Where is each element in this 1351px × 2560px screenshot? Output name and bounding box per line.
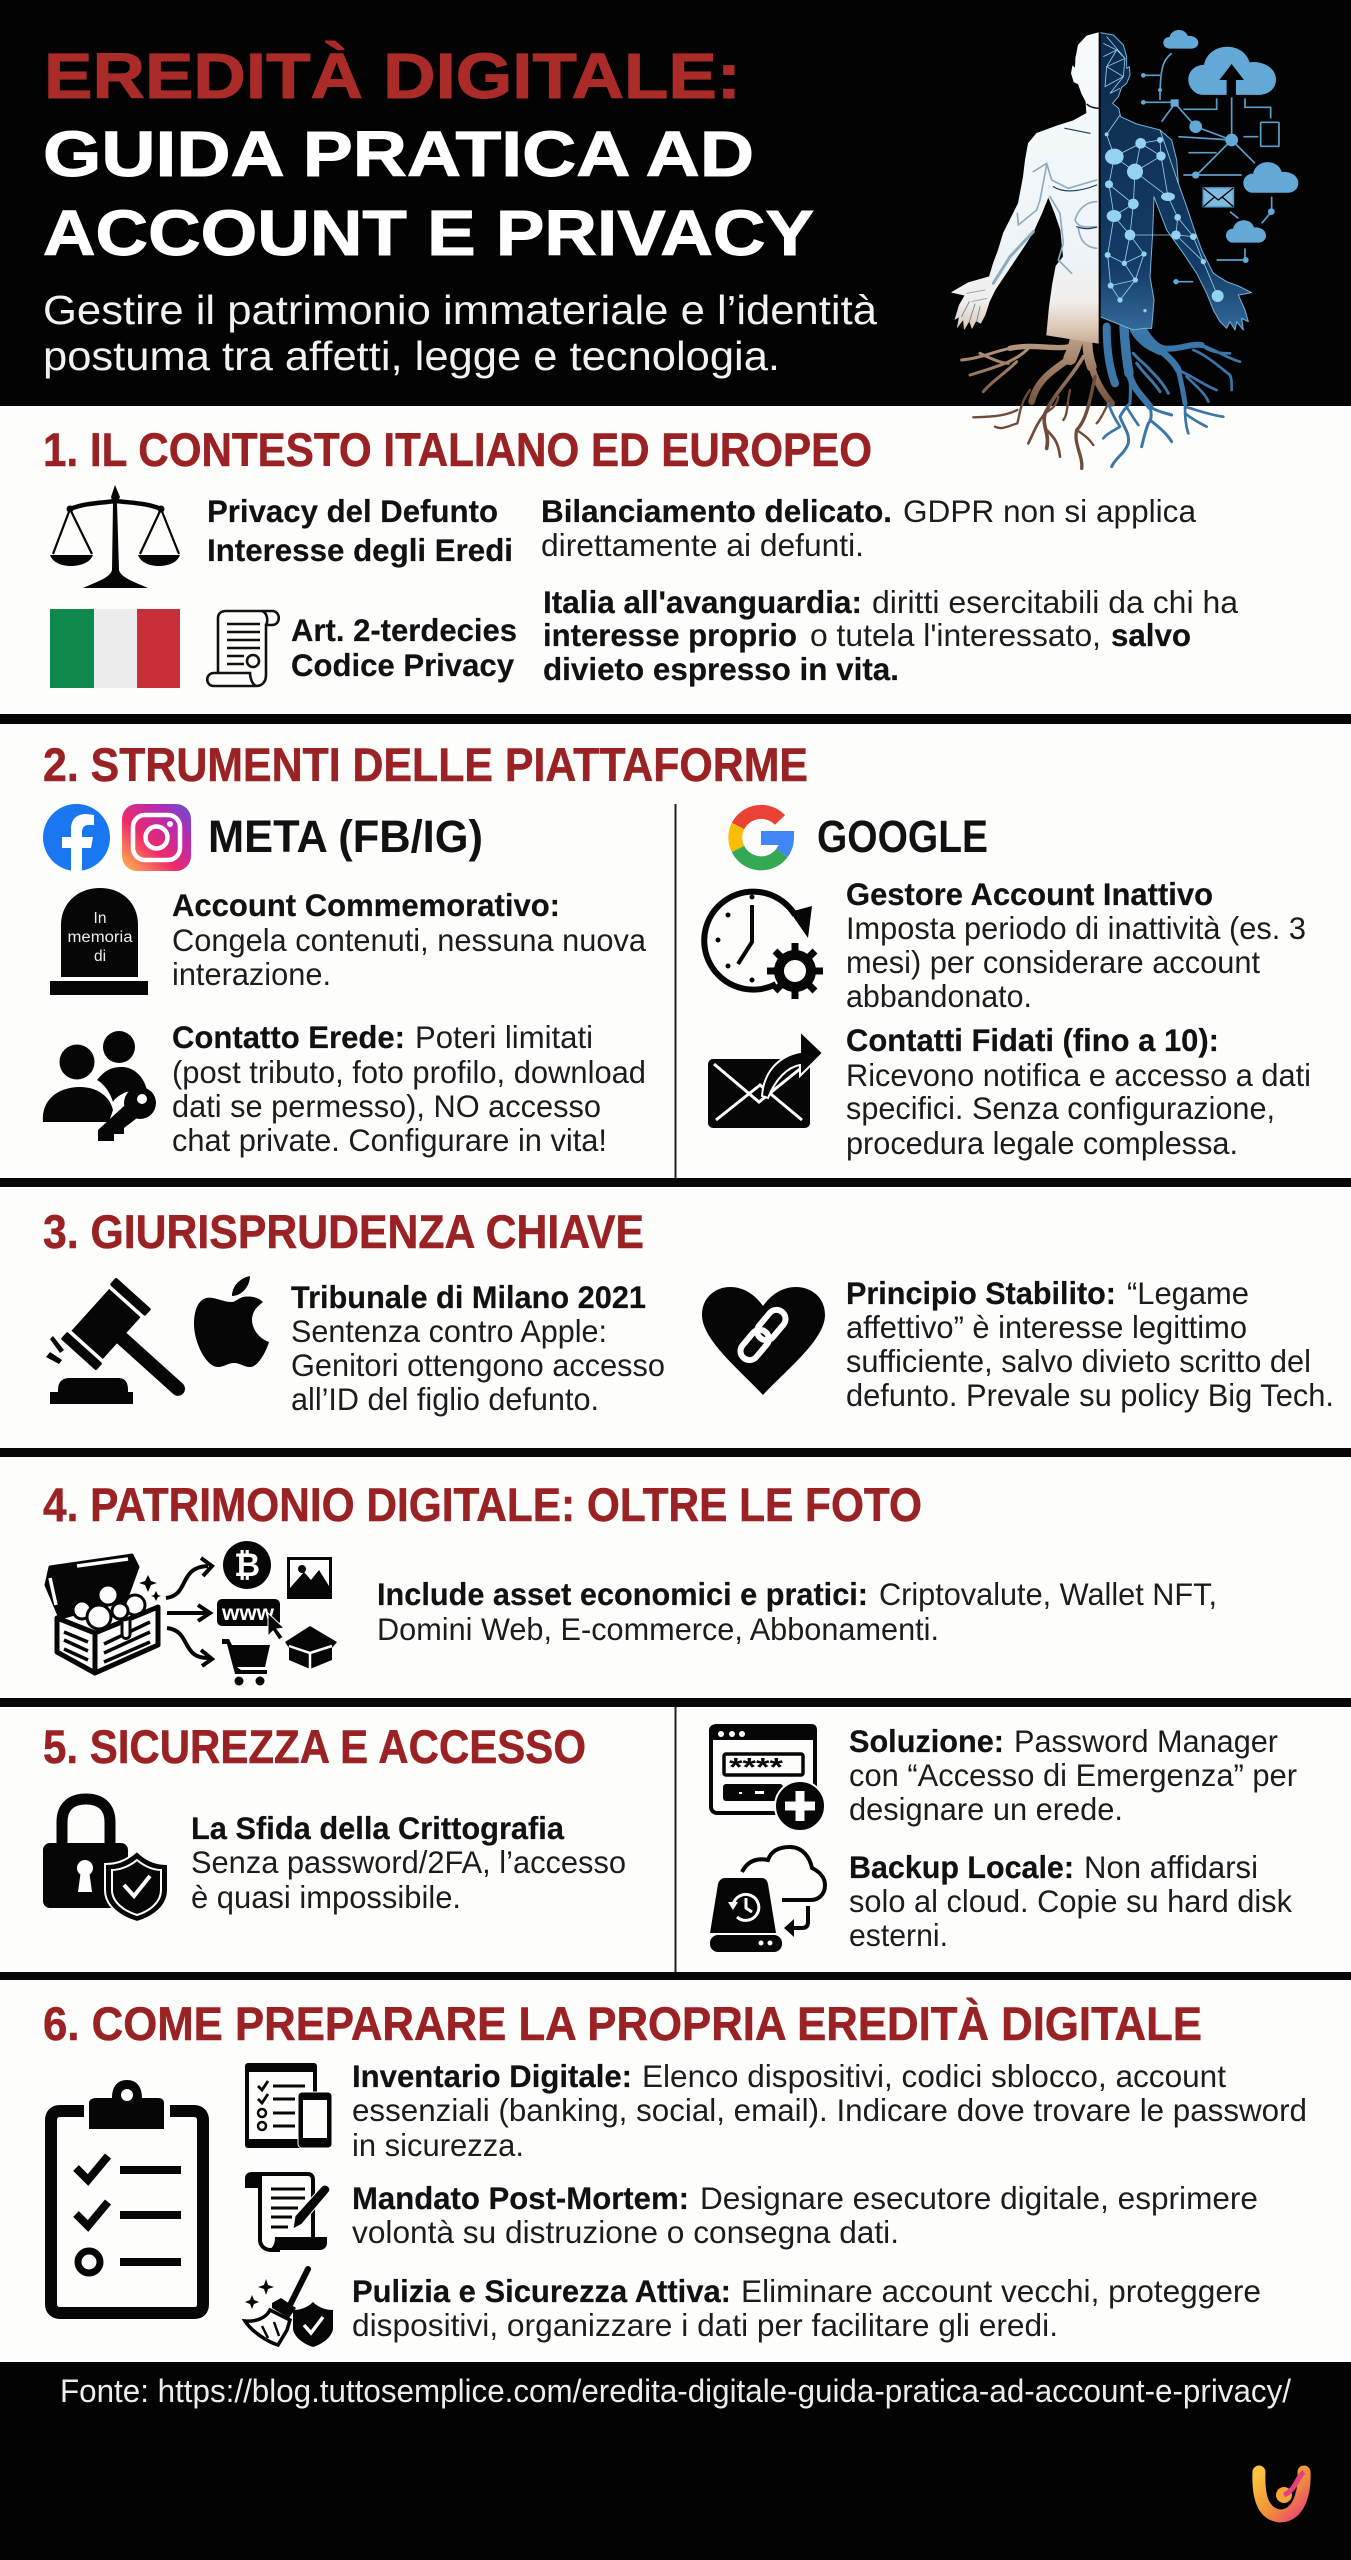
package box <box>285 1626 337 1669</box>
section 4: patrimonio digitale <box>43 1478 1217 1686</box>
footer panel <box>0 2362 1351 2560</box>
icon: heart with chain link <box>702 1287 825 1395</box>
text: principio stabilito: affettivo” è interesse legittimo <box>846 1309 1247 1345</box>
label: google: GOOGLE <box>817 811 988 862</box>
text: contatto erede: Poteri limitati <box>415 1019 593 1055</box>
text: bilanciamento delicato <box>541 493 1196 563</box>
icon cluster: treasure chest and digital assets <box>46 1541 337 1686</box>
text: sfida della crittografia: è quasi impossibile. <box>191 1879 461 1915</box>
text: gestore account inattivo <box>846 876 1306 1014</box>
text: mandato post-mortem: Mandato Post-Mortem: <box>352 2180 689 2216</box>
text: asset economici <box>377 1576 1217 1647</box>
text: account commemorativo <box>172 887 646 992</box>
icon: facebook <box>43 804 110 871</box>
text: gestore account inattivo: Imposta periodo di inattività (es. 3 <box>846 910 1306 946</box>
text: pulizia e sicurezza attiva <box>352 2273 1261 2343</box>
icon: gravestone <box>50 888 148 995</box>
text: inventario digitale: Elenco dispositivi, codici sblocco, account <box>642 2058 1226 2094</box>
section 3: giurisprudenza chiave <box>43 1205 1334 1424</box>
shopping cart <box>222 1639 270 1686</box>
section 5: sicurezza e accesso <box>43 1707 1297 1972</box>
right roots <box>1103 327 1240 467</box>
neck separation <box>1098 33 1102 320</box>
title: GUIDA PRATICA AD <box>43 118 754 190</box>
text: contatti fidati: specifici. Senza configurazione, <box>846 1090 1275 1126</box>
text: mandato post-mortem <box>352 2180 1258 2250</box>
text: backup locale <box>849 1849 1292 1953</box>
icon: password manager window <box>709 1724 825 1831</box>
text: italia all'avanguardia <box>543 584 1238 687</box>
arrows <box>166 1558 212 1666</box>
white body half <box>952 33 1098 343</box>
section 2: strumenti delle piattaforme <box>43 738 1311 1178</box>
bitcoin coin: ₿ <box>234 1547 260 1583</box>
icon: gravestone: memoria <box>68 929 133 946</box>
text: contatto erede: Contatto Erede: <box>172 1019 405 1055</box>
text: sfida della crittografia: La Sfida della Crittografia <box>191 1810 564 1846</box>
heading 1: 1. IL CONTESTO ITALIANO ED EUROPEO <box>43 423 872 476</box>
text: account commemorativo: Congela contenuti, nessuna nuova <box>172 922 646 958</box>
www button: www <box>221 1602 275 1625</box>
subtitle <box>43 287 877 379</box>
text: asset economici: Domini Web, E-commerce, Abbonamenti. <box>377 1611 939 1647</box>
heading 4: 4. PATRIMONIO DIGITALE: OLTRE LE FOTO <box>43 1478 922 1531</box>
icon: tablet and phone inventory <box>245 2063 332 2148</box>
heading 6: 6. COME PREPARARE LA PROPRIA EREDITÀ DIGITALE <box>43 1997 1202 2050</box>
muscle shading lines <box>962 163 1097 322</box>
text: pulizia e sicurezza attiva: dispositivi, organizzare i dati per facilitare gli eredi. <box>352 2307 1058 2343</box>
text: soluzione: con “Accesso di Emergenza” per <box>849 1757 1297 1793</box>
icon: scales of justice <box>50 485 180 588</box>
title: ACCOUNT E PRIVACY <box>43 197 814 269</box>
icon: scroll and pen <box>245 2172 330 2250</box>
text: italia all'avanguardia: o tutela l'interessato, <box>810 617 1101 653</box>
text: inventario digitale: Inventario Digitale: <box>352 2058 632 2094</box>
bitcoin coin <box>223 1541 271 1589</box>
text: soluzione: Soluzione: <box>849 1723 1004 1759</box>
text: italia all'avanguardia: Italia all'avanguardia: <box>543 584 862 620</box>
text: bilanciamento delicato: GDPR non si applica <box>903 493 1196 529</box>
text: pulizia e sicurezza attiva: Eliminare account vecchi, proteggere <box>741 2273 1261 2309</box>
section 6: come preparare <box>43 1997 1307 2347</box>
icon: envelope with arrow <box>708 1031 823 1128</box>
text: gestore account inattivo: abbandonato. <box>846 978 1032 1014</box>
text: contatti fidati: procedura legale complessa. <box>846 1125 1238 1161</box>
text: contatto erede: (post tributo, foto profilo, download <box>172 1054 646 1090</box>
logo <box>1259 2472 1304 2516</box>
text: italia all'avanguardia: interesse proprio <box>543 617 797 653</box>
text: account commemorativo: interazione. <box>172 956 331 992</box>
icon: password manager window: **** <box>729 1752 784 1782</box>
text: gestore account inattivo: Gestore Account Inattivo <box>846 876 1213 912</box>
text: pulizia e sicurezza attiva: Pulizia e Sicurezza Attiva: <box>352 2273 731 2309</box>
title: EREDITÀ DIGITALE: <box>44 40 741 112</box>
text: tribunale di milano: Sentenza contro Apple: <box>291 1313 607 1349</box>
www button <box>217 1599 284 1640</box>
text: contatto erede <box>172 1019 646 1158</box>
text: inventario digitale: essenziali (banking, social, email). Indicare dove trovare le password <box>352 2092 1307 2128</box>
text: inventario digitale <box>352 2058 1307 2163</box>
text: sfida della crittografia <box>191 1810 626 1915</box>
text: soluzione: Password Manager <box>1014 1723 1278 1759</box>
label: art. 2-terdecies: Art. 2-terdecies <box>291 612 517 648</box>
icon: apple logo <box>194 1276 269 1367</box>
text: tribunale di milano: Genitori ottengono accesso <box>291 1347 665 1383</box>
title <box>43 40 814 269</box>
text: contatti fidati <box>846 1022 1311 1161</box>
icon: backup drive and cloud <box>710 1847 825 1952</box>
text: contatto erede: dati se permesso), NO accesso <box>172 1088 601 1124</box>
labels: privacy vs eredi: Interesse degli Eredi <box>207 532 513 568</box>
text: backup locale: esterni. <box>849 1917 948 1953</box>
section 1: contesto italiano ed europeo <box>43 423 1238 688</box>
text: soluzione: designare un erede. <box>849 1791 1123 1827</box>
clouds and devices network <box>1141 30 1298 284</box>
icon: google <box>735 812 787 863</box>
text: soluzione <box>849 1723 1297 1827</box>
text: backup locale: solo al cloud. Copie su hard disk <box>849 1883 1292 1919</box>
text: backup locale: Backup Locale: <box>849 1849 1074 1885</box>
icon: gravestone: di <box>94 948 106 965</box>
text: contatti fidati: Contatti Fidati (fino a 10): <box>846 1022 1219 1058</box>
text: contatti fidati: Ricevono notifica e accesso a dati <box>846 1057 1311 1093</box>
text: italia all'avanguardia: diritti esercitabili da chi ha <box>872 584 1238 620</box>
source line: Fonte: https://blog.tuttosemplice.com/eredita-digitale-guida-pratica-ad-account-e-privacy/ <box>60 2373 1291 2409</box>
text: bilanciamento delicato: direttamente ai defunti. <box>541 527 864 563</box>
text: principio stabilito: “Legame <box>1127 1275 1249 1311</box>
image icon <box>287 1557 332 1599</box>
icon: gravestone: In <box>94 910 106 927</box>
network edges <box>1103 37 1218 300</box>
text: asset economici: Include asset economici e pratici: <box>377 1576 868 1612</box>
icon: Italian flag <box>50 609 180 688</box>
left roots <box>962 317 1112 448</box>
text: principio stabilito <box>846 1275 1334 1413</box>
hero illustration: half human half network figure with roots <box>952 30 1298 468</box>
text: sfida della crittografia: Senza password/2FA, l’accesso <box>191 1844 626 1880</box>
labels: privacy vs eredi <box>207 493 513 568</box>
text: mandato post-mortem: Designare esecutore digitale, esprimere <box>700 2180 1258 2216</box>
network nodes <box>1105 132 1224 312</box>
subtitle: postuma tra affetti, legge e tecnologia. <box>43 333 780 379</box>
heading 3: 3. GIURISPRUDENZA CHIAVE <box>43 1205 644 1258</box>
text: bilanciamento delicato: Bilanciamento delicato. <box>541 493 892 529</box>
icon: clock with gear <box>704 892 823 999</box>
text: tribunale di milano: all’ID del figlio defunto. <box>291 1381 599 1417</box>
dark network body half <box>1100 33 1252 330</box>
text: account commemorativo: Account Commemorativo: <box>172 887 560 923</box>
text: inventario digitale: in sicurezza. <box>352 2127 524 2163</box>
icon: broom and shield <box>245 2269 333 2347</box>
label: art. 2-terdecies <box>291 612 517 683</box>
text: contatto erede: chat private. Configurare in vita! <box>172 1122 607 1158</box>
icon: clipboard checklist <box>51 2080 203 2313</box>
text: italia all'avanguardia: salvo <box>1111 617 1191 653</box>
icon: legal scroll document <box>207 611 279 686</box>
subtitle: Gestire il patrimonio immateriale e l’identità <box>43 287 877 333</box>
text: principio stabilito: defunto. Prevale su policy Big Tech. <box>846 1377 1334 1413</box>
heading 5: 5. SICUREZZA E ACCESSO <box>43 1720 586 1773</box>
label: meta: META (FB/IG) <box>208 811 483 862</box>
icon: instagram <box>122 804 191 871</box>
text: principio stabilito: sufficiente, salvo divieto scritto del <box>846 1343 1311 1379</box>
text: principio stabilito: Principio Stabilito: <box>846 1275 1116 1311</box>
text: tribunale di milano <box>291 1279 665 1417</box>
icon: padlock with shield <box>43 1799 168 1922</box>
text: backup locale: Non affidarsi <box>1084 1849 1258 1885</box>
labels: privacy vs eredi: Privacy del Defunto <box>207 493 498 529</box>
text: mandato post-mortem: volontà su distruzione o consegna dati. <box>352 2214 899 2250</box>
text: italia all'avanguardia: divieto espresso in vita. <box>543 651 899 687</box>
header panel <box>0 0 1351 406</box>
text: asset economici: Criptovalute, Wallet NFT, <box>879 1576 1217 1612</box>
text: gestore account inattivo: mesi) per considerare account <box>846 944 1260 980</box>
icon: gavel <box>46 1277 211 1424</box>
text: tribunale di milano: Tribunale di Milano 2021 <box>291 1279 646 1315</box>
icon: people with key <box>43 1031 156 1141</box>
heading 2: 2. STRUMENTI DELLE PIATTAFORME <box>43 738 808 791</box>
treasure chest <box>46 1555 161 1673</box>
label: art. 2-terdecies: Codice Privacy <box>291 647 514 683</box>
